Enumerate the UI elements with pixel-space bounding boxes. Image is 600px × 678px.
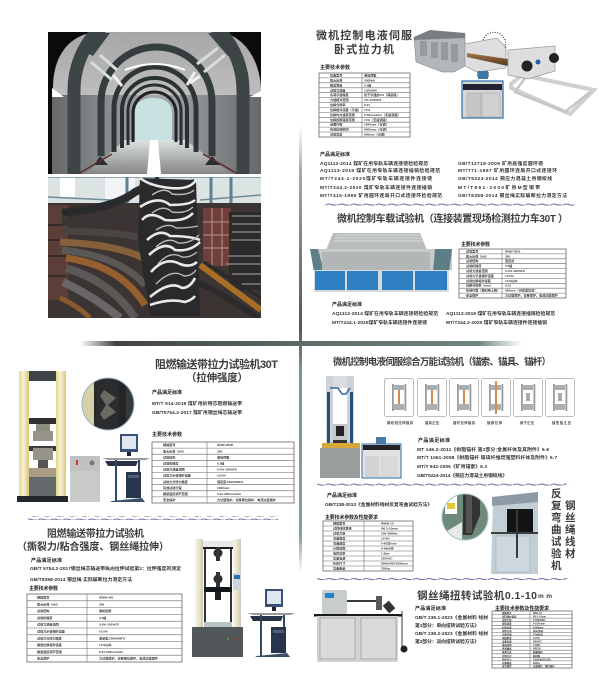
text block: product standards: 产品满足标准 [415, 605, 446, 612]
table: technical parameters: 测量精度 [502, 636, 512, 640]
fixture captions: 锚垫板正压 [552, 420, 572, 425]
fixture captions: 锚具正压 [425, 420, 440, 425]
table: technical parameters: 0.01 [364, 103, 370, 107]
table: technical parameters: 试验力测量范围 [163, 467, 185, 472]
text block: product standards: MT/T244.1-2020煤矿窄轨车辆连接件连接链 [332, 319, 427, 326]
table: technical parameters: 负荷示值精度 [330, 92, 349, 97]
table: technical parameters: ±0-90° [381, 537, 391, 541]
table: technical parameters: 1000mm [217, 486, 230, 490]
table: technical parameters: 0.5级 [217, 460, 225, 466]
table: technical parameters: 300 [99, 602, 104, 606]
panel: wire rope torsion tester [314, 589, 572, 668]
text block: product standards: AQ1112-2014 煤矿在用窄轨车辆连接链检验规范 [332, 310, 438, 317]
table: technical parameters: 试验机精度 [466, 263, 481, 268]
title: horizontal tensile machine: 卧式拉力机 [334, 42, 394, 56]
table: technical parameters: 2%-100%FS [364, 98, 381, 102]
table: technical parameters: 液压伺服 [364, 72, 377, 78]
table: technical parameters: 0-180r/min [533, 623, 545, 626]
table: technical parameters: 夹具硬度 [502, 647, 512, 651]
table: technical parameters: 100-300Nm [381, 532, 398, 536]
table: technical parameters: 安全保护 [163, 497, 175, 502]
table: technical parameters: 最大负荷（kN） [163, 448, 186, 453]
illustration: repeated bending machine [491, 492, 538, 574]
table: technical parameters: 液压伺服 [217, 454, 230, 459]
spec label: 主要技术参数 [320, 64, 350, 71]
text block: product standards: AQ1113-2015 煤矿在用窄轨车辆连接插销检验规范 [320, 167, 440, 174]
text block: product standards: 第1部分：单向扭转试验方法》 [415, 622, 479, 629]
table: technical parameters: 安全保护 [37, 656, 49, 661]
table: technical parameters: 最大负荷 [330, 77, 342, 82]
table: technical parameters: 位移分辨率 [330, 102, 345, 107]
table: technical parameters: 满足度1/500000FS [99, 635, 125, 640]
table: technical parameters: 控制方式 [502, 654, 512, 658]
table: technical parameters: 设备电源 [502, 640, 512, 644]
table: technical parameters: 0.4%-100%FS [505, 269, 525, 273]
illustration: vehicle-mounted machine [310, 233, 452, 292]
table: technical parameters: 外形尺寸 [502, 657, 512, 661]
vertical divider [299, 125, 302, 572]
table: technical parameters: Φ0.3-10mm [381, 527, 398, 531]
title: vehicle-mounted testing machine: 微机控制车载试验机（连接装置现场检测拉力车30T ） [337, 212, 568, 225]
title: universal testing machine for anchors: 微机控制电液伺服综合万能试验机（锚索、锚具、锚杆） [333, 356, 551, 368]
table: technical parameters: 0-500mm [533, 626, 543, 629]
table: technical parameters: 600mm（可调） [364, 132, 387, 136]
illustration: floor standing tensile machine [17, 371, 68, 502]
text block: product standards: MT/T71-1997 矿用圆环连局开口式连接环 [458, 167, 557, 174]
text block: product standards: GB/T5224-2014《预应力混凝土用钢绞线》 [417, 472, 507, 479]
title: conveyor belt tensile tester 30T: 阻燃输送带拉力试验机30T [155, 357, 278, 371]
table: technical parameters: 规格型号 [163, 442, 175, 447]
vertical title: steel wire material: 钢 [565, 499, 576, 512]
table: technical parameters: 试验型号 [466, 248, 478, 253]
table: technical parameters: 单向/双向 [533, 629, 544, 633]
table: technical parameters: 位移均匀速度范围 [330, 112, 355, 117]
table: technical parameters: 0-9999次 [381, 546, 395, 551]
text block: product standards: GB/T8358-2014 钢丝绳实际破断拉力测定方法 [458, 192, 567, 199]
table: technical parameters: 试验力分辨力精度 [163, 479, 188, 484]
table: technical parameters: 试验力矩 [333, 531, 345, 536]
title: conveyor belt tensile tester tear and adhesion: （撕裂力/粘合强度、钢丝绳拉伸） [17, 540, 169, 553]
table: technical parameters: ±0.5% [505, 274, 514, 278]
table: technical parameters: 试验力测量范围 [37, 622, 59, 627]
table: technical parameters: 0.01 [505, 284, 511, 288]
table: technical parameters: ±1%以内 [505, 278, 517, 283]
table: technical parameters: 扭转速度 [502, 622, 512, 626]
table: technical parameters: 触摸屏 [533, 654, 541, 658]
table: technical parameters: 有效试验行程 [163, 485, 182, 490]
text block: product standards [415, 605, 488, 645]
table: technical parameters: 外形尺寸 [333, 561, 345, 566]
table: technical parameters: WAW-300L [505, 249, 521, 253]
table: technical parameters: 试样线材直径 [502, 615, 517, 619]
table: technical parameters: 弯曲速度 [333, 541, 345, 546]
table: technical parameters: 0.01-200mm/min [217, 492, 241, 496]
text block: product standards [332, 301, 555, 326]
table: technical parameters: 1/300000 [364, 88, 377, 92]
table: technical parameters: 试样线材直径 [333, 526, 352, 531]
table: technical parameters: 设备电源 [333, 556, 346, 561]
table: technical parameters: 250kg [381, 567, 390, 571]
title: horizontal tensile machine [316, 28, 412, 56]
table: technical parameters: 试验力示值相对误差 [163, 473, 191, 478]
table: technical parameters: 安全保护 [502, 664, 512, 668]
fixture captions: 锚杆拉伸锚具 [453, 420, 476, 425]
table: technical parameters: 300kg [533, 662, 540, 665]
text block: product standards: GB/T8358-2014 钢丝绳 实际破断拉力测定方法 [30, 576, 132, 583]
vertical title: repeated bending tester: 复 [551, 499, 562, 512]
table: technical parameters: 设备型号 [330, 72, 342, 78]
table: technical parameters: 规格型号 [37, 594, 49, 600]
illustration: control console [362, 437, 401, 478]
table: technical parameters: 1500X600X1100 [533, 658, 551, 661]
panel: horizontal tensile machine [316, 28, 594, 199]
table: technical parameters: 有效拉伸空间 [330, 127, 349, 132]
text block: product standards: MT/T244.1-2020煤矿窄轨车辆连接件连接链 [320, 175, 432, 182]
table: technical parameters: 0.5级 [505, 263, 513, 268]
spec label: 主要技术参数 [461, 241, 490, 248]
vertical title: repeated bending tester: 弯 [551, 511, 562, 524]
table: technical parameters: 试验力示值相对误差 [466, 273, 494, 278]
table: technical parameters: 最大负荷（kN） [37, 601, 60, 606]
table: technical parameters: 试验力测量 [330, 87, 345, 92]
table: technical parameters: ±1%以内 [99, 642, 111, 647]
text block: product standards: MT/T861-2000矿用M型钢带 [458, 184, 540, 191]
vertical title: repeated bending tester: 验 [551, 547, 562, 560]
table: technical parameters: HRC60 [533, 648, 542, 651]
table: technical parameters: 试验力分辨力精度 [37, 635, 62, 640]
table: technical parameters: 有效行程（再利用上限） [466, 288, 500, 293]
text block: product standards: GB/T238-2013《金属材料线材反复弯曲试验方法》 [325, 501, 432, 508]
table: technical parameters: 满足度1/500000FS [217, 479, 243, 484]
panel: universal testing machine for anchors [320, 356, 574, 479]
table: technical parameters: 220VAC [381, 557, 393, 561]
table: technical parameters: 标距长度 [502, 625, 512, 629]
table: technical parameters: 试验力测量范围 [466, 268, 488, 273]
text block: product standards: 产品满足标准 [418, 437, 450, 444]
table: technical parameters: 1000mm（可调） [364, 122, 389, 127]
table: technical parameters: 横梁速度调节范围 [163, 491, 188, 496]
illustration: control console [462, 71, 503, 118]
table: technical parameters: 0.4%-100%FS [99, 623, 119, 627]
text block: product standards: GB/T 239.1-2023《金属材料 线材 [415, 614, 488, 621]
table: technical parameters: ±0.5% [217, 474, 226, 478]
table: technical parameters: 试验结构 [37, 608, 49, 613]
text block: product standards: AQ1113-2015 煤矿在用窄轨车辆连接插销检验规范 [446, 310, 555, 317]
text block: product standards: MT/T 1061-2008《树脂锚杆 玻璃纤维增强塑料杆体及附件》6.7 [417, 454, 557, 461]
panel: conveyor belt tensile tester 30T [17, 357, 294, 503]
text block: product standards: MT/T 942-2005《矿用锚索》6.3 [417, 463, 487, 470]
table: technical parameters: 弯曲角度 [333, 536, 345, 541]
table: technical parameters: 横梁位移相对误差 [37, 642, 62, 647]
table: technical parameters: 位移分辨率（mm） [466, 283, 493, 288]
text block: product standards [30, 557, 181, 583]
illustration: horizontal tensile machine [414, 30, 594, 118]
table: technical parameters: ±1%（无级调速） [364, 117, 389, 122]
table: technical parameters: 位移控制速度范围 [330, 117, 355, 122]
table: technical parameters: 计数范围 [502, 632, 512, 636]
fixture captions: 销子正压 [520, 420, 535, 425]
text block: product standards: MT/T244.2-2020 煤矿窄轨车辆连接件连接插销 [320, 184, 432, 191]
table: technical parameters: 优于示值的1%（满量程） [364, 92, 399, 97]
text block: product standards: AQ1112-2014 煤矿在用窄轨车辆连接链检验规范 [320, 160, 428, 167]
illustration: computer desk [247, 589, 295, 657]
vertical title: repeated bending tester: 反 [551, 487, 562, 500]
text block: product standards: 产品满足标准 [327, 492, 357, 499]
illustration: hydraulic universal machine [320, 376, 360, 478]
table: technical parameters: 0-60次/min [381, 541, 397, 546]
table: technical parameters: 电机功率 [333, 551, 345, 556]
table: technical parameters: 1.5kW [533, 644, 541, 647]
table: technical parameters: 试验位移相对误差 [466, 278, 491, 283]
spec label: 主要技术参数及性能要求 [325, 514, 378, 521]
table: technical parameters: 0-9999次 [533, 632, 543, 636]
text block: product standards: 产品满足标准 [152, 389, 182, 396]
table: technical parameters: 设备重量 [333, 566, 345, 571]
table: technical parameters: 设备重量 [502, 661, 512, 665]
table: technical parameters: 试验力示值相对误差 [37, 628, 65, 634]
icon: grip detail circle [82, 378, 136, 430]
table: technical parameters: ±0.5% [533, 637, 541, 640]
title: horizontal tensile machine: 微机控制电液伺服 [316, 28, 412, 42]
vertical title: repeated bending tester [551, 487, 562, 572]
table: technical parameters: 电机功率 [502, 643, 512, 647]
table: technical parameters: 位移相对误差（示值） [330, 107, 361, 112]
table: technical parameters: 力过载保护、位移限位保护、电流过载保护 [217, 497, 276, 502]
table: technical parameters: 试验机精度 [163, 460, 178, 466]
fixture captions: 钢绞线拉伸锚具 [387, 420, 414, 425]
table: technical parameters: 300 [505, 254, 510, 258]
table: technical parameters [27, 594, 182, 662]
table: technical parameters: 0-50000Nm [533, 619, 546, 622]
title: conveyor belt tensile tester tear and adhesion [17, 527, 169, 553]
table: technical parameters: WNJ-10 [533, 612, 542, 615]
text block: product standards: GB/T5224-2014 预应力混凝土用钢绞线 [458, 175, 552, 182]
table: technical parameters: 扭转方向 [502, 629, 512, 633]
table: technical parameters: 300 [217, 449, 222, 453]
table: technical parameters: 0-50mm/min（无级调速） [364, 112, 401, 117]
table: technical parameters: 试验宽度 [330, 132, 342, 136]
table: technical parameters: WDW-300 [99, 596, 113, 600]
vertical title: steel wire material: 线 [565, 535, 576, 548]
table: technical parameters: 计数范围 [333, 546, 345, 551]
text block: product standards: 第2部分：双向扭转试验方法》 [415, 638, 479, 645]
table: technical parameters [492, 611, 572, 668]
table: technical parameters: 试验结构 [466, 258, 478, 263]
spec label: 主要技术参数 [152, 431, 182, 438]
table: technical parameters: WAW-300D [217, 443, 234, 447]
vertical title: steel wire material [565, 499, 576, 560]
text block: product standards: MT 146.2-2011《树脂锚杆 第2部分:金属杆体及其附件》6.6 [417, 446, 549, 453]
table: technical parameters: 3000kN [364, 78, 376, 82]
table: technical parameters: 900mm（可任意设定） [505, 288, 537, 293]
vertical title: repeated bending tester: 机 [551, 559, 562, 572]
text block: product standards [320, 151, 567, 199]
illustration: computer desk [102, 434, 150, 502]
panel: vehicle-mounted testing machine [310, 212, 568, 326]
table: technical parameters: 液压式 [505, 258, 515, 263]
table: technical parameters: 微机控制 [99, 608, 111, 613]
panel: conveyor belt tensile tester tear and adhesion [17, 527, 295, 662]
photo: steel arch tunnel supports [48, 32, 261, 174]
photo: stacked U-shaped steel sections [48, 177, 261, 318]
table: technical parameters: 配重砝码 [533, 650, 543, 654]
text block: product standards: 产品满足标准 [31, 557, 62, 564]
table: technical parameters: 试验机精度 [37, 615, 52, 620]
table: technical parameters: 0.5级 [364, 82, 372, 87]
table: technical parameters: Φ0.1-10mm [533, 616, 546, 619]
title: wire rope torsion tester: mm [538, 593, 552, 600]
table: technical parameters [459, 248, 566, 298]
table: technical parameters: 最大负荷（kN） [466, 253, 489, 258]
text block: product standards: 产品满足标准 [320, 151, 350, 158]
illustration: electronic universal tester [192, 539, 243, 657]
table: technical parameters: 过载保护、限位保护 [533, 664, 555, 668]
title: wire rope torsion tester: 钢丝绳扭转试验机0.1-10 [417, 589, 537, 602]
table: technical parameters: 规格型号 [333, 521, 345, 526]
fixture captions: 锚索拉伸 [487, 420, 503, 425]
table: technical parameters: 0.5级 [99, 615, 107, 620]
text block: product standards [152, 389, 242, 416]
text block: product standards [417, 437, 557, 479]
table: technical parameters: 试验力矩 [502, 618, 512, 622]
vertical title: repeated bending tester: 试 [551, 536, 562, 548]
panel: wire repeated bending tester [323, 487, 576, 574]
icon: clamp detail circle [442, 494, 488, 541]
table: technical parameters: 0.4%-100%FS [217, 468, 237, 472]
table: technical parameters: 力值相对范围 [330, 97, 349, 102]
text block: product standards [325, 492, 432, 508]
table: technical parameters: 安全保护 [466, 292, 478, 298]
table: technical parameters: 380VAC [533, 640, 542, 644]
vertical title: steel wire material: 材 [565, 547, 576, 560]
text block: product standards: MT/T244.2-2020 煤矿窄轨车辆连接件连接插销 [446, 319, 547, 326]
illustration: wire rope torsion tester [314, 590, 408, 662]
table: technical parameters: ±0.5% [99, 630, 108, 634]
table: technical parameters: 800X500X1800mm [381, 562, 408, 566]
spec label: 主要技术参数及性能要求 [495, 605, 549, 612]
table: technical parameters: WWD-10 [381, 522, 394, 526]
text block: product standards: GB/T 239.2-2023《金属材料 线材 [415, 630, 488, 637]
text block: product standards: 产品满足标准 [332, 301, 362, 308]
table: technical parameters: 1.5kw [381, 552, 390, 556]
table: technical parameters: 规格型号 [502, 611, 512, 615]
vertical title: steel wire material: 丝 [565, 511, 576, 524]
title: conveyor belt tensile tester tear and adhesion: 阻燃输送带拉力试验机 [47, 527, 144, 540]
icons: six loading fixture thumbnails [384, 378, 574, 416]
table: technical parameters: ±1% [364, 108, 370, 112]
text block: product standards: GB/T12718-2009 矿用高强度圆环链 [458, 160, 543, 167]
spec label: 主要技术参数 [29, 585, 58, 592]
table: technical parameters: 精度等级 [330, 82, 343, 87]
text block: product standards: GB/T5754.2-2017 煤矿用钢丝绳芯输送带 [152, 409, 242, 416]
table: technical parameters: 5000mm（可调） [364, 127, 389, 132]
horizontal divider [80, 341, 523, 346]
title: conveyor belt tensile tester 30T [155, 357, 278, 384]
fixture captions [387, 420, 572, 425]
table: technical parameters: 横梁速度调节范围 [37, 649, 62, 654]
table: technical parameters: 力过载保护、位移保护、电流过载保护 [505, 292, 558, 298]
illustration: hydraulic control box [70, 456, 100, 502]
table: technical parameters: 力过载保护、位移限位保护、电流过载保护 [99, 656, 158, 661]
text block: product standards: GB/T 5754.2-2017钢丝绳芯输送带纵向拉伸试验第2：拉伸强度的测定 [30, 565, 181, 572]
title: conveyor belt tensile tester 30T: （拉伸强度） [186, 371, 248, 384]
vertical title: steel wire material: 绳 [565, 523, 576, 536]
table: technical parameters: 张紧方式 [502, 650, 512, 654]
table: technical parameters [152, 442, 294, 503]
vertical title: repeated bending tester: 曲 [551, 523, 562, 536]
table: technical parameters [319, 72, 410, 137]
table: technical parameters: 试验结构 [163, 454, 175, 459]
table: technical parameters [323, 521, 413, 571]
table: technical parameters: 0.01-500mm/min [99, 650, 123, 654]
table: technical parameters: 活塞行程 [330, 122, 342, 127]
text block: product standards: MT/T 914-2019 煤矿用织物芯阻燃输送带 [152, 400, 242, 407]
text block: product standards: MT/T415-1995 矿用圆环连局开口式连接环检验规范 [320, 192, 442, 199]
